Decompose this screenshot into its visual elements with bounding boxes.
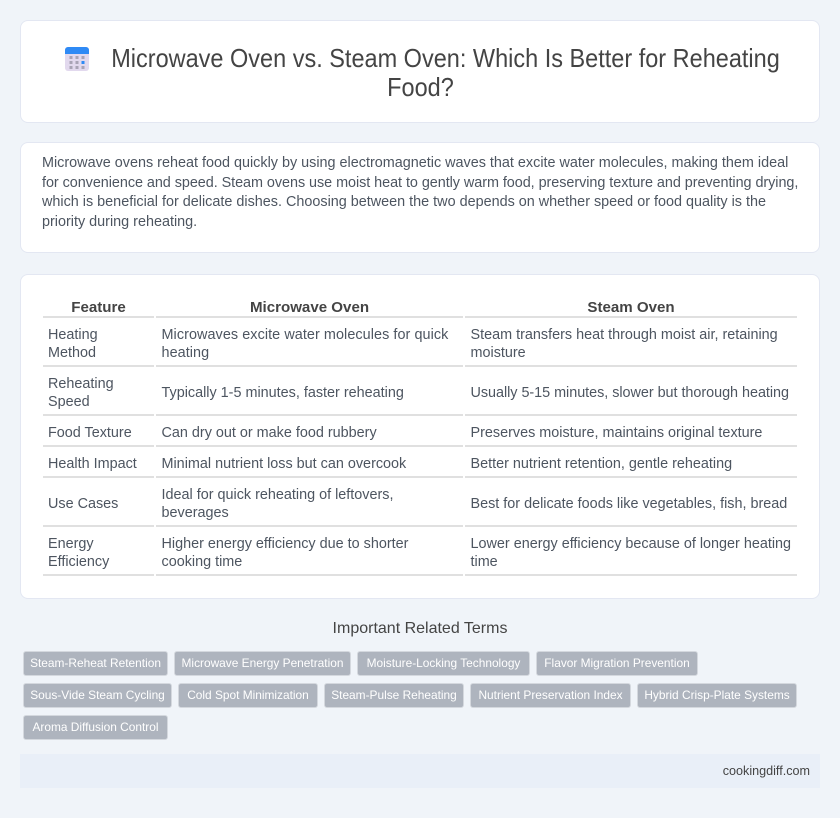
tag: Cold Spot Minimization [187, 688, 309, 702]
footer bar [20, 754, 820, 788]
intro paragraph: Microwave ovens reheat food quickly by using electromagnetic waves that excite water molecules, making them ideal [42, 155, 788, 171]
intro paragraph [42, 155, 798, 230]
heading: related terms: Important Related Terms [333, 620, 507, 637]
row: Reheating Speed: Typically 1-5 minutes, faster reheating [162, 385, 404, 401]
title: Microwave Oven vs. Steam Oven: Which Is Better for Reheating [111, 45, 780, 73]
row: Energy Efficiency: cooking time [162, 554, 242, 570]
row: Energy Efficiency: Energy [48, 536, 94, 552]
row: Use Cases: Use Cases [48, 496, 118, 512]
table header: Microwave Oven [156, 298, 463, 318]
tag: Steam-Reheat Retention [30, 656, 161, 670]
row: Use Cases: Best for delicate foods like vegetables, fish, bread [470, 496, 787, 512]
tag [174, 651, 351, 676]
tag: Flavor Migration Prevention [544, 656, 690, 670]
tag [357, 651, 530, 676]
row: Food Texture: Food Texture [48, 425, 132, 441]
tag: Sous-Vide Steam Cycling [30, 688, 165, 702]
row: Energy Efficiency: time [470, 554, 498, 570]
table header: Microwave Oven: Microwave Oven [250, 299, 369, 316]
row: Heating Method: heating [162, 345, 209, 361]
row: Heating Method: Microwaves excite water molecules for quick [162, 327, 448, 343]
title: Food? [387, 74, 453, 102]
tag [23, 715, 168, 740]
tag: Steam-Pulse Reheating [331, 688, 457, 702]
panel: comparison table [20, 274, 820, 599]
row: Heating Method: moisture [470, 345, 526, 361]
tag: Hybrid Crisp-Plate Systems [644, 688, 790, 702]
row: Food Texture: Can dry out or make food rubbery [162, 425, 377, 441]
icon: calendar grid [65, 47, 89, 71]
tag [178, 683, 318, 708]
row: Reheating Speed: Speed [48, 394, 90, 410]
row: Energy Efficiency: Efficiency [48, 554, 109, 570]
table header: Steam Oven [465, 298, 797, 318]
row: Food Texture [43, 425, 797, 447]
tag [23, 651, 168, 676]
table header: Feature: Feature [71, 299, 126, 316]
title [111, 45, 780, 102]
row: Health Impact: Health Impact [48, 456, 137, 472]
row: Heating Method: Method [48, 345, 96, 361]
row: Energy Efficiency [43, 536, 797, 576]
tag [637, 683, 797, 708]
panel: title header [20, 20, 820, 123]
footer source text: cookingdiff.com [723, 764, 810, 778]
intro paragraph: which is beneficial for delicate dishes. Choosing between the two depends on whether speed or food quality is the [42, 194, 766, 210]
row: Use Cases: Ideal for quick reheating of leftovers, [162, 487, 393, 503]
row: Use Cases [43, 487, 797, 527]
tag: Nutrient Preservation Index [478, 688, 623, 702]
row: Reheating Speed: Reheating [48, 376, 114, 392]
row: Reheating Speed: Usually 5-15 minutes, slower but thorough heating [470, 385, 789, 401]
row: Heating Method: Steam transfers heat through moist air, retaining [470, 327, 778, 343]
row: Heating Method [43, 327, 797, 367]
row: Reheating Speed [43, 376, 797, 416]
row: Energy Efficiency: Lower energy efficiency because of longer heating [470, 536, 791, 552]
tag: Aroma Diffusion Control [32, 720, 158, 734]
tag [470, 683, 631, 708]
tag [324, 683, 464, 708]
row: Food Texture: Preserves moisture, maintains original texture [470, 425, 762, 441]
tag: Microwave Energy Penetration [182, 656, 343, 670]
tag group: related terms [23, 651, 797, 740]
row: Energy Efficiency: Higher energy efficiency due to shorter [162, 536, 408, 552]
table header: Feature [43, 298, 154, 318]
row: Heating Method: Heating [48, 327, 98, 343]
tag: Moisture-Locking Technology [367, 656, 520, 670]
intro paragraph: priority during reheating. [42, 214, 197, 230]
row: Health Impact: Minimal nutrient loss but can overcook [162, 456, 406, 472]
table header: Steam Oven: Steam Oven [587, 299, 675, 316]
row: Health Impact [43, 456, 797, 478]
row: Health Impact: Better nutrient retention, gentle reheating [470, 456, 732, 472]
tag [23, 683, 172, 708]
intro paragraph: for convenience and speed. Steam ovens use moist heat to gently warm food, preserving texture and preventing drying, [42, 175, 798, 191]
panel: introduction text [20, 142, 820, 253]
tag [536, 651, 698, 676]
row: Use Cases: beverages [162, 505, 229, 521]
